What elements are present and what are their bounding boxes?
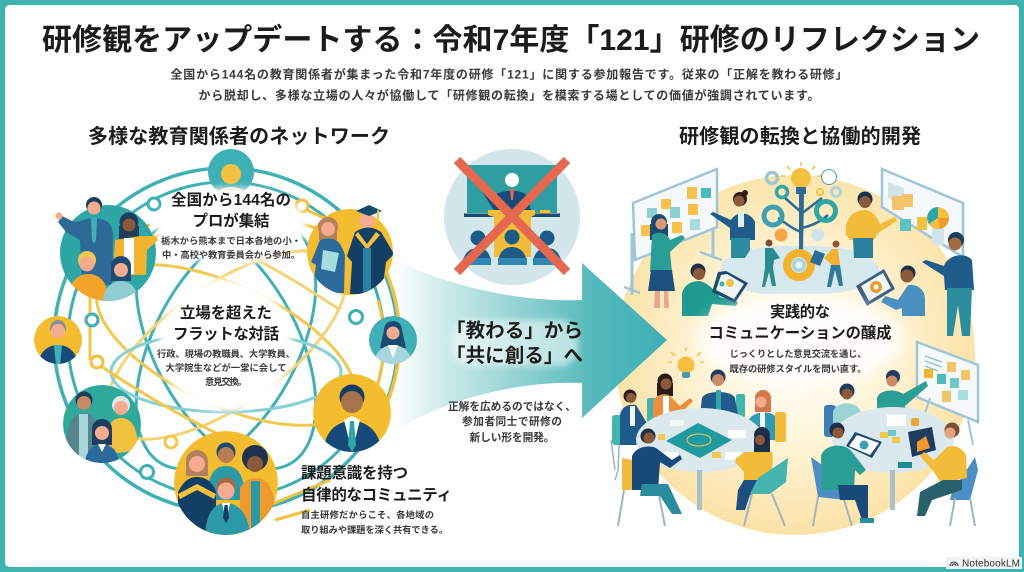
intro text: 全国から144名の教育関係者が集まった令和7年度の研修「121」に関する参加報告です。従来の「正解を教わる研修」 (170, 66, 848, 82)
text block: practical communication: 既存の研修スタイルを問い直す。 (730, 363, 866, 374)
avatar: right small woman (369, 316, 417, 368)
table group: lower left (611, 370, 788, 526)
avatar: lower-left family (63, 385, 141, 465)
text block: practical communication: じっくりとした意見交流を通じ、 (730, 348, 866, 359)
avatar: right man in suit (313, 374, 391, 452)
text block: arrow caption (448, 400, 576, 444)
intro text (170, 66, 848, 102)
avatar: upper-right graduate and teacher (307, 205, 394, 295)
arrow text glow (452, 320, 578, 366)
text block: arrow caption: 正解を広めるのではなく、 (448, 400, 576, 413)
whiteboard: top right (882, 169, 963, 257)
text block: arrow caption: 参加者同士で研修の (462, 415, 562, 428)
avatar: bottom group (174, 431, 278, 540)
text block: autonomous community (301, 464, 452, 535)
person: woman at board (648, 214, 685, 308)
text block: nationwide professionals: 栃木から熊本まで日本各地の小・ (161, 235, 301, 246)
icon: idea tree with gears (764, 162, 840, 277)
arrow: from teaching to co-creating (388, 256, 667, 436)
network rings (54, 168, 400, 520)
text block: arrow heading: 「共に創る」へ (446, 345, 583, 367)
text block: flat dialogue: 立場を超えた (180, 304, 272, 322)
text backing: centre (160, 279, 292, 411)
text block: arrow heading: 「教わる」から (446, 320, 583, 342)
icon: lightbulb lower (668, 347, 704, 378)
person: man standing right (922, 232, 974, 336)
text block: arrow caption: 新しい形を開発。 (470, 431, 554, 444)
whiteboard: top left (624, 169, 722, 295)
table group: lower right (811, 370, 978, 526)
text backing: right panel (696, 298, 904, 382)
text block: autonomous community: 取り組みや課題を深く共有できる。 (301, 524, 448, 535)
title: 研修観をアップデートする：令和7年度「121」研修のリフレクション (42, 23, 980, 57)
text block: flat dialogue: フラットな対話 (173, 325, 279, 343)
text block: practical communication: コミュニケーションの醸成 (708, 324, 892, 342)
watermark: NotebookLM (946, 557, 1022, 570)
person: presenter at top (710, 190, 755, 258)
intro text: から脱却し、多様な立場の人々が協働して「研修観の転換」を模索する場としての価値が強調されています。 (198, 88, 820, 102)
whiteboard: lower right (917, 342, 978, 445)
network connection nodes (86, 198, 362, 478)
icon: crossed-out lecture (444, 149, 580, 285)
people beside the gear (762, 240, 843, 287)
text block: nationwide professionals: プロが集結 (192, 211, 270, 230)
avatar: upper-left group (56, 197, 158, 303)
text block: flat dialogue (157, 304, 295, 387)
text block: nationwide professionals: 全国から144名の (171, 190, 291, 209)
text block: autonomous community: 課題意識を持つ (301, 464, 408, 482)
person: seated man with tablet (682, 264, 748, 316)
text block: flat dialogue: 行政、現場の教職員、大学教員、 (157, 348, 295, 359)
panel: right collaboration background (615, 175, 975, 535)
text backing: top (155, 188, 307, 264)
watermark: NotebookLM: NotebookLM (962, 558, 1020, 570)
text block: autonomous community: 自律的なコミュニティ (301, 485, 452, 504)
heading: network: 多様な教育関係者のネットワーク (88, 125, 390, 148)
person: man in yellow (846, 192, 897, 258)
avatar: top partially hidden (208, 149, 254, 196)
pale blue stage (721, 246, 879, 294)
text block: practical communication (708, 303, 892, 374)
heading: transformation: 研修観の転換と協働的開発 (679, 125, 921, 148)
text block: autonomous community: 自主研修だからこそ、各地域の (301, 509, 434, 520)
person: seated man with tablet right (856, 266, 925, 316)
text block: flat dialogue: 意見交換。 (205, 376, 247, 387)
text block: flat dialogue: 大学院生などが一堂に会して (166, 362, 286, 373)
avatar: left small man (34, 316, 82, 368)
text block: nationwide professionals (161, 190, 301, 260)
text block: arrow heading (446, 320, 583, 367)
text block: practical communication: 実践的な (770, 303, 830, 321)
text block: nationwide professionals: 中・高校や教育委員会から参加。 (162, 249, 300, 260)
